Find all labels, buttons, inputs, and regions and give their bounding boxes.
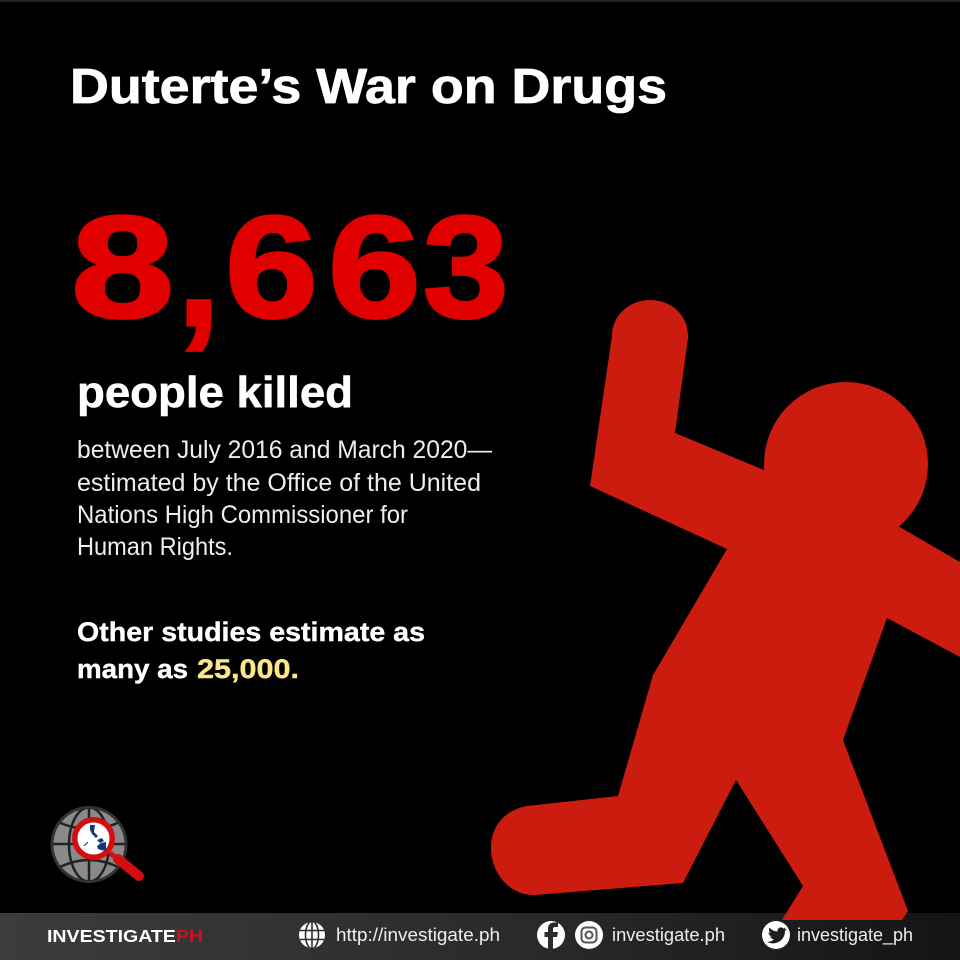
brand name: INVESTIGATE PH (47, 926, 203, 946)
other estimates callout: 25,000. (197, 654, 299, 684)
icon: facebook (537, 921, 565, 949)
red body outline figure (491, 300, 960, 920)
description text: estimated by the Office of the United (77, 469, 481, 497)
big number: , (177, 176, 220, 360)
other estimates callout: Other studies estimate as (77, 617, 425, 647)
subheading: people killed (77, 368, 353, 417)
big number: 8 (71, 186, 174, 348)
big number: 3 (423, 186, 508, 348)
footer bar (0, 913, 960, 960)
facebook and instagram handle: investigate.ph (612, 925, 725, 945)
description text: Nations High Commissioner for (77, 501, 408, 529)
description text: Human Rights. (77, 533, 233, 561)
icon: website globe (299, 922, 325, 948)
other estimates callout (77, 617, 425, 684)
description text (77, 436, 492, 561)
website url: http://investigate.ph (336, 925, 500, 945)
description text: between July 2016 and March 2020— (77, 436, 492, 464)
icon: twitter (762, 921, 790, 949)
big number: 6 (225, 187, 318, 349)
other estimates callout: many as (77, 654, 188, 684)
icon: instagram (575, 921, 603, 949)
big number: 6 (328, 187, 421, 349)
big number (71, 176, 508, 360)
twitter handle: investigate_ph (797, 925, 913, 946)
title: Duterte’s War on Drugs (70, 59, 667, 114)
logo: globe with magnifier (52, 806, 139, 882)
